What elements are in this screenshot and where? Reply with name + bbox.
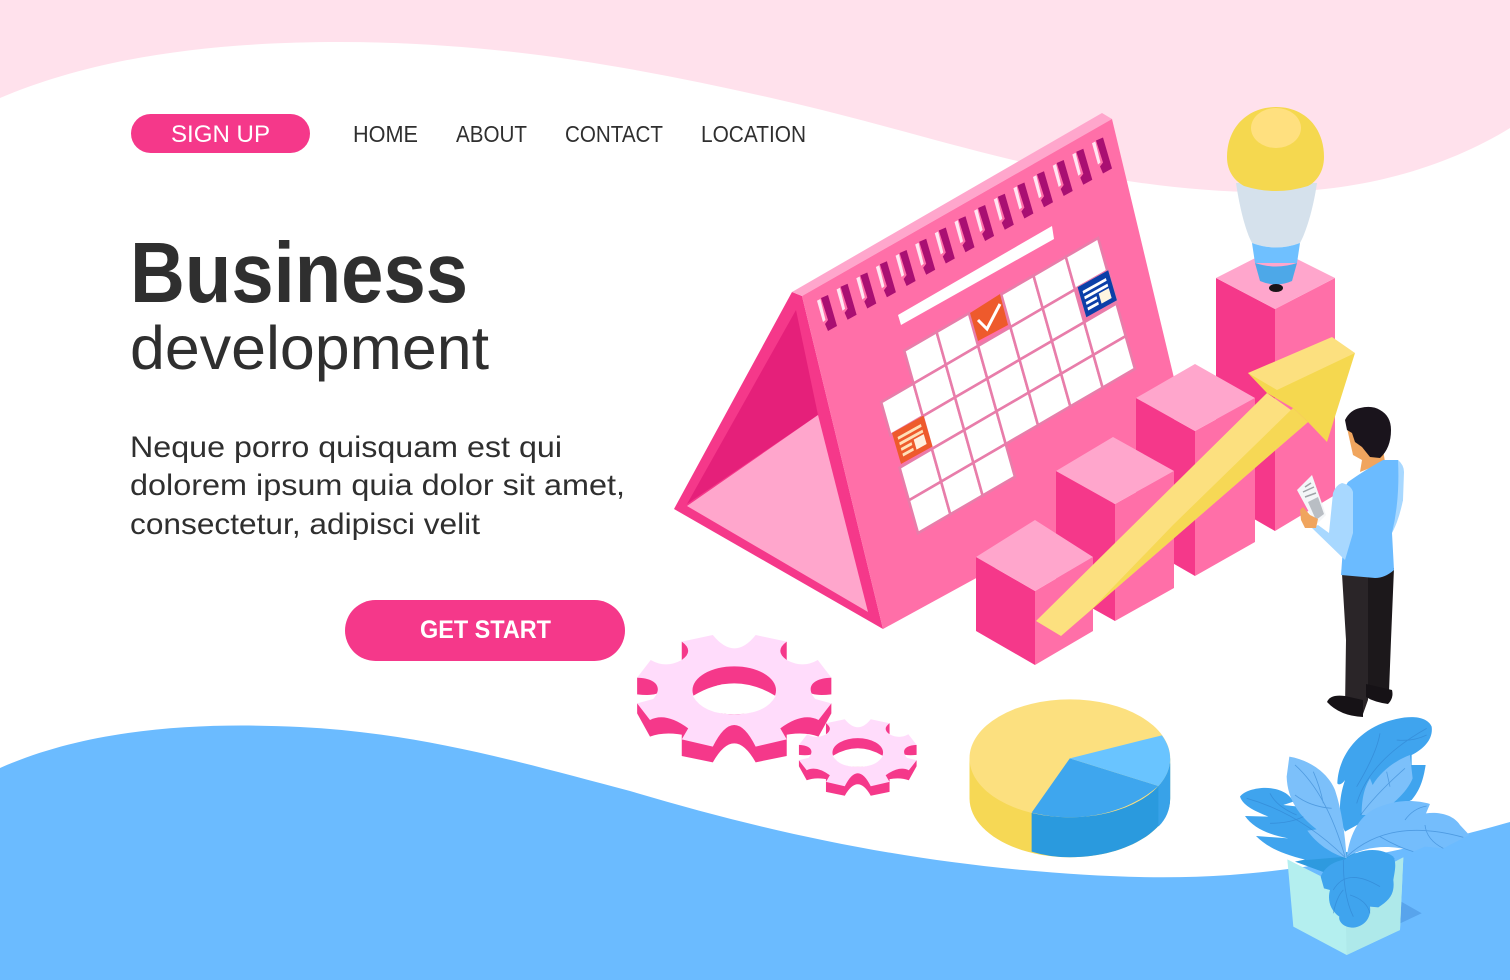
bulb base	[1252, 243, 1300, 263]
blue note day	[1077, 270, 1118, 318]
calendar inner back	[687, 310, 818, 504]
blue bottom wave	[0, 725, 1510, 980]
body text: consectetur, adipisci velit	[130, 508, 481, 541]
bottom dark leaf	[1321, 850, 1395, 928]
title: development	[130, 314, 489, 382]
pie top light blue	[1070, 735, 1170, 786]
right light leaf	[1347, 801, 1469, 857]
navigation menu: CONTACT	[565, 121, 663, 147]
calendar side frame	[674, 292, 883, 629]
title	[130, 226, 489, 382]
shoes	[1366, 684, 1392, 704]
navigation menu	[353, 121, 806, 147]
calendar top ridge	[792, 113, 1112, 296]
spiral rings	[817, 138, 1112, 331]
pie top blue	[1032, 758, 1158, 817]
left light leaf	[1287, 757, 1347, 858]
bar 4 tallest	[1216, 248, 1335, 531]
light bulb	[1227, 107, 1324, 292]
pie chart	[970, 699, 1170, 857]
neck and face	[1347, 428, 1385, 472]
calendar date grid	[872, 238, 1144, 533]
hand	[1300, 507, 1318, 528]
body text	[130, 431, 625, 541]
tablet	[1297, 475, 1326, 525]
sleeve arm	[1312, 483, 1353, 560]
soil	[1295, 852, 1395, 880]
orange note day	[892, 416, 932, 464]
pie top yellow	[970, 699, 1170, 817]
body text: dolorem ipsum quia dolor sit amet,	[130, 469, 625, 502]
hair	[1345, 407, 1391, 458]
pie side	[970, 758, 1170, 857]
big gear	[637, 635, 831, 762]
title: Business	[130, 226, 468, 321]
pot	[1287, 857, 1403, 955]
bar 3	[1136, 364, 1255, 576]
calendar inner base	[687, 415, 868, 612]
navigation menu: ABOUT	[456, 121, 527, 147]
get start button	[345, 600, 625, 661]
orange check day	[970, 294, 1008, 341]
sign up button: SIGN UP	[171, 121, 270, 148]
shirt	[1341, 460, 1403, 578]
body text: Neque porro quisquam est qui	[130, 431, 562, 464]
leaf veins	[1247, 728, 1463, 917]
man with tablet	[1297, 407, 1404, 717]
calendar front face	[802, 119, 1174, 629]
pink top wave	[0, 0, 1510, 192]
sign up button	[131, 114, 310, 153]
navigation menu: LOCATION	[701, 121, 806, 147]
bulb body	[1236, 183, 1317, 248]
desk calendar	[674, 113, 1174, 629]
small gear	[799, 719, 917, 796]
legs	[1366, 568, 1394, 692]
left dark leaf	[1240, 788, 1347, 860]
bar 2	[1056, 437, 1174, 621]
month title bar	[898, 226, 1054, 325]
potted plant	[1240, 717, 1469, 955]
top dark leaf	[1337, 717, 1432, 832]
bar 1	[976, 520, 1093, 665]
navigation menu: HOME	[353, 121, 418, 147]
pot shadow	[1397, 900, 1422, 925]
bulb glass	[1227, 107, 1324, 191]
growth arrow	[1036, 337, 1355, 636]
get start button: GET START	[420, 616, 551, 644]
inner light leaf	[1362, 755, 1413, 815]
